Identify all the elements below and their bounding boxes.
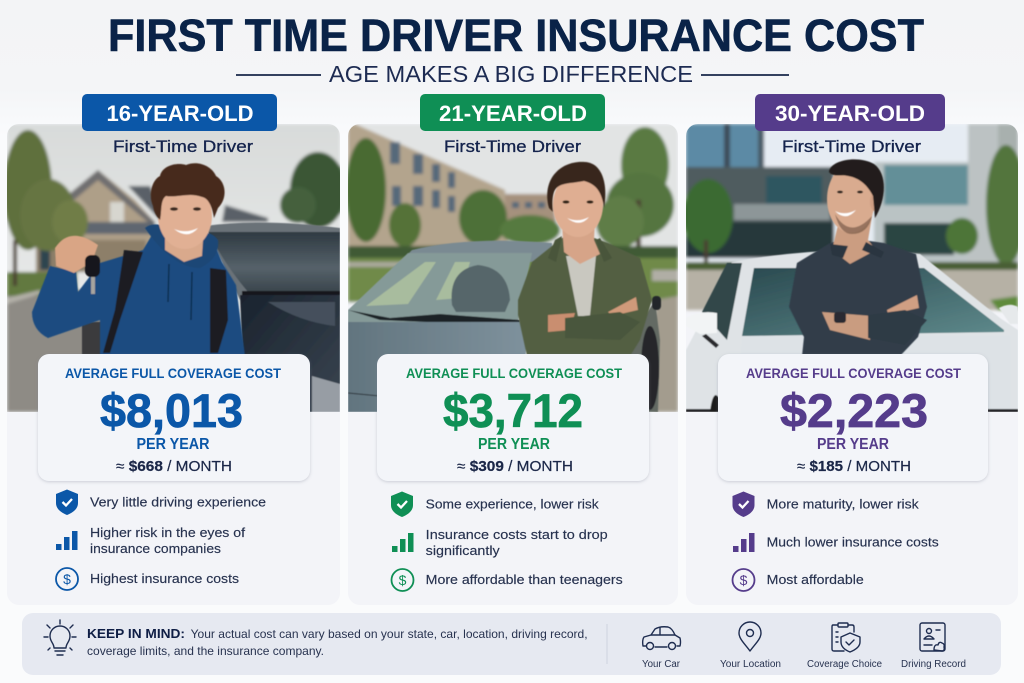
person: man in olive shirt: [518, 162, 652, 356]
price card: $2,223: [780, 384, 928, 437]
price card: $3,712: [443, 384, 583, 437]
panel: 21-year-old: [346, 124, 678, 605]
badge: 21-year-old: [420, 94, 605, 131]
price card: ≈ $185 / MONTH: [797, 459, 911, 475]
photo: adult with white car: [683, 124, 1024, 412]
icon: dollar: [392, 569, 414, 591]
icon: driving record: [920, 623, 945, 651]
icon: dollar: [56, 568, 78, 590]
note text: KEEP IN MIND:: [87, 626, 185, 641]
price card: PER YEAR: [136, 436, 210, 453]
label: your location: Your Location: [720, 659, 781, 670]
icon: car: [643, 627, 680, 650]
list text: risk: insurance companies: [90, 541, 222, 556]
list text: lower costs: Much lower insurance costs: [767, 534, 939, 550]
price card: [718, 354, 988, 481]
label: first-time driver 2: First-Time Driver: [444, 138, 582, 156]
price card: PER YEAR: [817, 436, 889, 453]
price card: ≈ $309 / MONTH: [457, 459, 573, 475]
icon: shield: [732, 492, 754, 517]
label: your car: Your Car: [642, 659, 681, 670]
person: man in dark shirt: [789, 159, 927, 356]
car: dark sedan: [82, 222, 340, 412]
panel: 30-year-old: [683, 124, 1024, 605]
title: FIRST TIME DRIVER INSURANCE COST: [108, 10, 924, 61]
label: coverage choice: Coverage Choice: [807, 659, 882, 670]
list text: experience: Very little driving experience: [90, 494, 266, 510]
icon: shield: [56, 490, 78, 515]
label: driving record: Driving Record: [901, 659, 966, 670]
photo: teen driver with car keys: [4, 124, 346, 412]
panel: 16-year-old: [4, 124, 346, 605]
list text: affordable: More affordable than teenagers: [426, 572, 623, 587]
price card: AVERAGE FULL COVERAGE COST: [406, 366, 623, 381]
car: grey sedan: [348, 241, 661, 412]
footer: keep in mind: [22, 613, 1001, 675]
icon: bars: [392, 533, 414, 552]
icon: location pin: [739, 622, 761, 651]
badge: 30-year-old: 30-YEAR-OLD: [775, 101, 925, 126]
label: first-time driver 1: First-Time Driver: [113, 138, 254, 156]
badge: 30-year-old: [755, 94, 945, 131]
badge: 16-year-old: 16-YEAR-OLD: [106, 101, 254, 126]
price card: AVERAGE FULL COVERAGE COST: [746, 366, 962, 381]
price card: [38, 354, 310, 481]
list text: risk: Higher risk in the eyes of: [90, 525, 245, 540]
badge: 21-year-old: 21-YEAR-OLD: [439, 101, 587, 126]
photo: young man with car: [346, 124, 678, 412]
badge: 16-year-old: [82, 94, 277, 131]
price card: $8,013: [100, 384, 243, 437]
icon: dollar: $: [399, 572, 407, 588]
price card: AVERAGE FULL COVERAGE COST: [65, 366, 282, 381]
subtitle: AGE MAKES A BIG DIFFERENCE: [329, 61, 693, 87]
car: white sedan: [686, 250, 1018, 412]
list text: experience: Some experience, lower risk: [426, 496, 599, 512]
icon: dollar: [732, 569, 754, 591]
list text: drop: Insurance costs start to drop: [426, 527, 608, 542]
icon: dollar: $: [740, 572, 748, 588]
icon: clipboard with shield: [832, 623, 860, 652]
note text: Your actual cost can vary based on your state, car, location, driving record,: [191, 627, 588, 641]
icon: bars: [56, 531, 78, 550]
person: teen in blue hoodie: [32, 163, 245, 356]
list text: most affordable: Most affordable: [767, 572, 864, 587]
list text: maturity: More maturity, lower risk: [767, 496, 919, 512]
price card: [377, 354, 649, 481]
note text: coverage limits, and the insurance company.: [87, 644, 324, 658]
icon: light bulb: [44, 620, 76, 655]
price card: PER YEAR: [478, 436, 550, 453]
icon: shield: [391, 492, 413, 517]
price card: ≈ $668 / MONTH: [116, 459, 232, 475]
icon: dollar: $: [63, 571, 71, 587]
label: first-time driver 3: First-Time Driver: [782, 138, 922, 156]
list text: drop: significantly: [426, 543, 500, 558]
icon: bars: [733, 533, 754, 552]
list text: cost: Highest insurance costs: [90, 571, 240, 586]
